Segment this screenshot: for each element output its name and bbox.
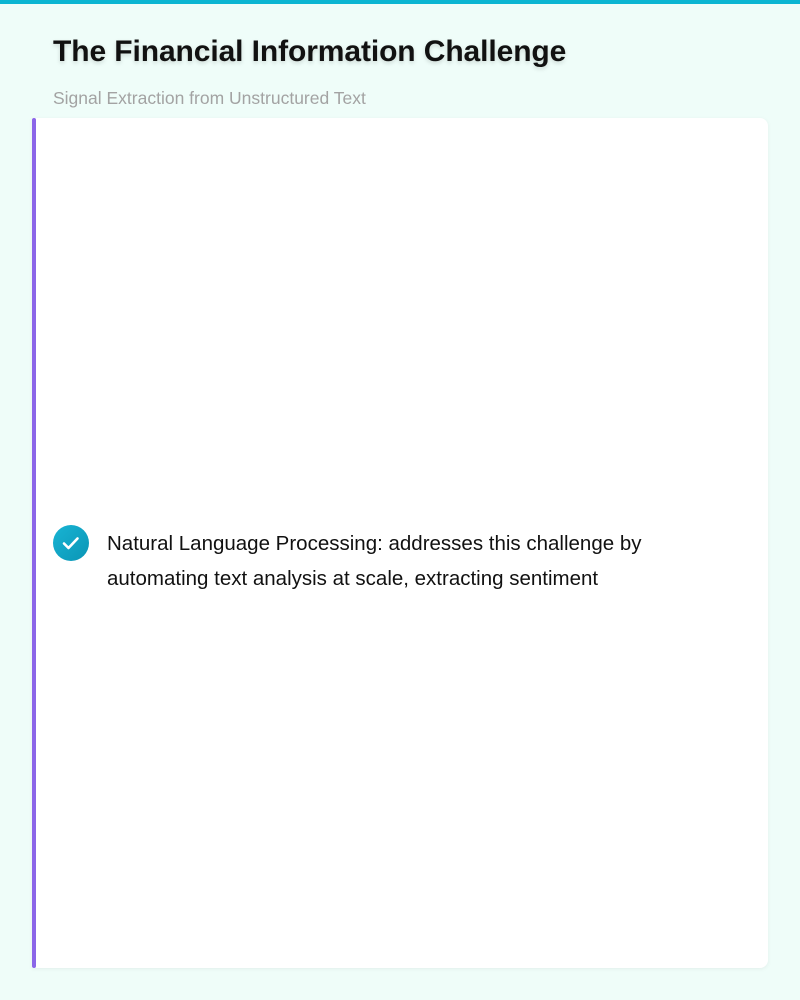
icon: check circle [53,525,89,561]
subtitle: Signal Extraction from Unstructured Text [53,88,366,108]
text block: Natural Language Processing: addresses this challenge by [107,532,641,555]
text block [107,532,642,590]
list item: NLP [53,525,642,590]
panel: main card [32,118,768,968]
title: The Financial Information Challenge [53,35,566,68]
text block: automating text analysis at scale, extracting sentiment [107,567,598,590]
